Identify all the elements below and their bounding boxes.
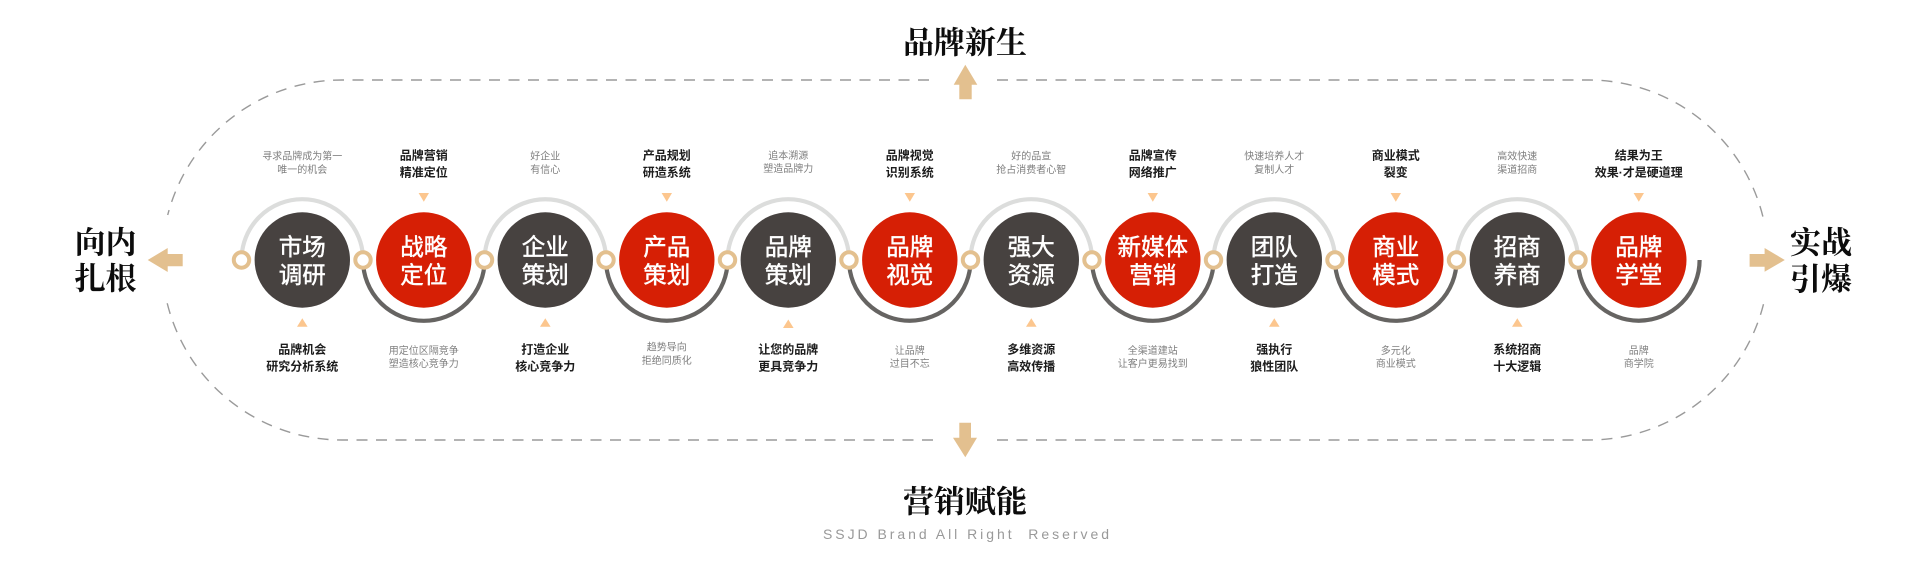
heading: left: 向内 (74, 226, 136, 260)
step 3: enterprise planning: 核心竞争力 (515, 358, 575, 374)
step 2: strategic positioning: 用定位区隔竞争 (389, 344, 459, 357)
step 7: strong resources: 抢占消费者心智 (996, 163, 1066, 176)
step 10: business model: 多元化 (1381, 344, 1411, 357)
step 4: product planning: 拒绝同质化 (642, 354, 692, 367)
step 6: brand visual: 品牌视觉 (886, 148, 934, 162)
step 1: market research: 市场 (279, 234, 326, 260)
step 11: investment attraction: 养商 (1494, 262, 1541, 288)
heading: right (1790, 226, 1852, 297)
heading: bottom: 营销赋能 (903, 484, 1027, 520)
heading: left: 扎根 (74, 262, 136, 296)
arrow: down (953, 423, 977, 457)
step 2: strategic positioning (363, 148, 485, 370)
step 11: investment attraction: 十大逻辑 (1493, 358, 1541, 374)
step 5: brand planning: 塑造品牌力 (763, 162, 813, 175)
step 12: brand academy: 结果为王 (1615, 148, 1663, 162)
step 5: brand planning: 让您的品牌 (758, 342, 818, 356)
connector rings (234, 252, 1586, 268)
dashed stadium outline (166, 80, 1764, 440)
step 3: enterprise planning: 策划 (522, 262, 569, 288)
arrow: right (1750, 248, 1785, 272)
step 11: investment attraction: 系统招商 (1493, 342, 1541, 356)
step 9: team building: 快速培养人才 (1244, 149, 1304, 162)
step 3: enterprise planning: 有信心 (530, 163, 560, 176)
step 8: new media marketing (1092, 148, 1214, 370)
step 6: brand visual: 过目不忘 (890, 357, 930, 370)
heading: right: 引爆 (1790, 262, 1852, 297)
step 10: business model: 商业模式 (1376, 357, 1416, 370)
step 8: new media marketing: 全渠道建站 (1128, 344, 1178, 357)
step 5: brand planning: 追本溯源 (768, 149, 808, 162)
step 7: strong resources (970, 149, 1092, 374)
step 10: business model: 模式 (1372, 262, 1419, 288)
step 7: strong resources: 强大 (1008, 234, 1055, 260)
heading: right: 实战 (1790, 226, 1852, 260)
step 7: strong resources: 高效传播 (1007, 358, 1055, 374)
step 7: strong resources: 多维资源 (1007, 342, 1055, 356)
step 4: product planning: 趋势导向 (647, 340, 687, 354)
arrow: left (148, 248, 183, 272)
step 12: brand academy: 品牌 (1615, 234, 1662, 260)
copyright line: SSJD Brand All Right Reserved (823, 526, 1109, 542)
step 3: enterprise planning (484, 149, 606, 374)
step 8: new media marketing: 品牌宣传 (1129, 148, 1177, 162)
step 9: team building (1214, 149, 1335, 374)
step 7: strong resources: 好的品宣 (1011, 149, 1051, 162)
step 9: team building: 狼性团队 (1250, 358, 1298, 374)
step 9: team building: 打造 (1251, 262, 1298, 288)
step 1: market research: 唯一的机会 (277, 163, 327, 176)
step 1: market research: 研究分析系统 (266, 358, 338, 374)
step 11: investment attraction: 渠道招商 (1497, 163, 1537, 176)
step 4: product planning: 产品 (643, 234, 690, 260)
step 8: new media marketing: 新媒体 (1118, 234, 1188, 260)
step 4: product planning: 研造系统 (643, 164, 691, 180)
arrow: up (954, 65, 977, 99)
step 2: strategic positioning: 塑造核心竞争力 (389, 357, 459, 370)
step 6: brand visual: 让品牌 (895, 344, 925, 357)
step 1: market research (242, 149, 363, 374)
heading: left (74, 226, 136, 296)
step 4: product planning (606, 148, 728, 367)
step 12: brand academy: 商学院 (1624, 357, 1654, 370)
step 2: strategic positioning: 战略 (400, 234, 448, 260)
step 10: business model: 商业模式 (1372, 148, 1420, 162)
step 3: enterprise planning: 打造企业 (521, 342, 569, 356)
step 6: brand visual: 品牌 (886, 234, 933, 260)
step 1: market research: 品牌机会 (278, 342, 326, 356)
step 6: brand visual: 识别系统 (886, 164, 934, 180)
step 9: team building: 强执行 (1256, 342, 1292, 356)
step 10: business model (1335, 148, 1457, 370)
step 4: product planning: 策划 (643, 262, 690, 288)
step 12: brand academy: 效果·才是硬道理 (1595, 164, 1683, 180)
step 10: business model: 商业 (1372, 234, 1419, 260)
step 8: new media marketing: 营销 (1129, 262, 1176, 288)
step 6: brand visual (849, 148, 971, 370)
step 4: product planning: 产品规划 (643, 148, 691, 162)
step 5: brand planning: 品牌 (765, 234, 812, 260)
step 5: brand planning (728, 149, 849, 374)
step 3: enterprise planning: 好企业 (530, 149, 560, 162)
step 12: brand academy: 学堂 (1615, 262, 1662, 288)
step 3: enterprise planning: 企业 (522, 234, 569, 260)
step 8: new media marketing: 让客户更易找到 (1118, 357, 1188, 370)
step 9: team building: 团队 (1251, 234, 1298, 260)
step 1: market research: 调研 (279, 262, 326, 288)
step 5: brand planning: 更具竞争力 (758, 358, 818, 374)
step 11: investment attraction: 高效快速 (1497, 149, 1537, 162)
step 5: brand planning: 策划 (765, 262, 812, 288)
step 9: team building: 复制人才 (1254, 163, 1294, 176)
step 12: brand academy (1578, 148, 1700, 370)
step 11: investment attraction: 招商 (1494, 234, 1541, 260)
step 11: investment attraction (1456, 149, 1578, 374)
step 1: market research: 寻求品牌成为第一 (262, 149, 342, 162)
step 12: brand academy: 品牌 (1629, 344, 1649, 357)
step 2: strategic positioning: 品牌营销 (400, 148, 448, 162)
step 2: strategic positioning: 精准定位 (400, 164, 448, 180)
step 10: business model: 裂变 (1384, 164, 1408, 180)
step 6: brand visual: 视觉 (886, 262, 933, 288)
step 8: new media marketing: 网络推广 (1129, 164, 1177, 180)
step 7: strong resources: 资源 (1008, 262, 1055, 288)
step 2: strategic positioning: 定位 (400, 262, 447, 288)
heading: top: 品牌新生 (903, 26, 1027, 60)
